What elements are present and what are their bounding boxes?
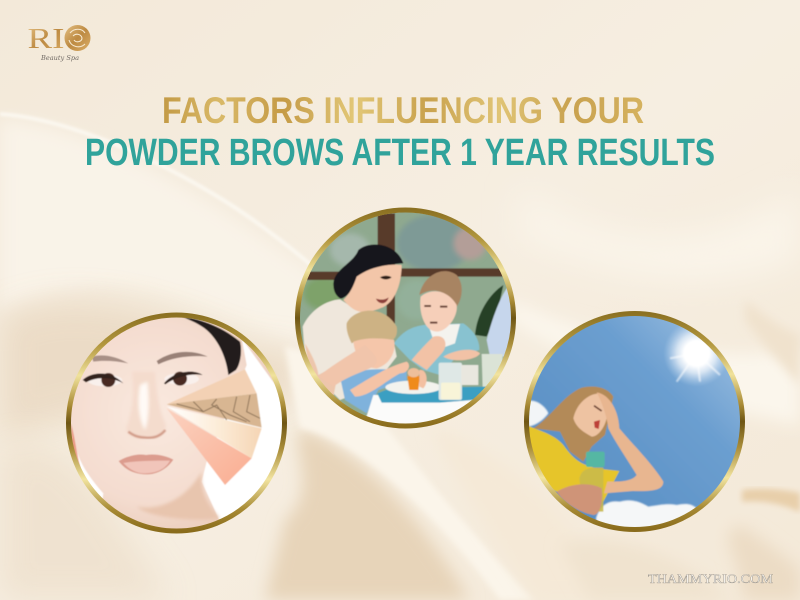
boy's hair: [347, 311, 397, 343]
logo rose emblem: [64, 25, 90, 51]
hand: [557, 484, 602, 515]
logo tagline: Beauty Spa: [40, 54, 79, 62]
closed eye: [594, 406, 602, 411]
girl's hoodie: [394, 323, 479, 375]
woman's hand: [326, 351, 371, 385]
glass of milk: [439, 363, 462, 400]
photo circle: woman under the hot sun: [526, 312, 747, 532]
girl's eyes and mouth: [424, 306, 447, 323]
woman's eye: [380, 276, 392, 279]
window frame: [307, 213, 503, 323]
arm: [597, 392, 663, 493]
plate: [385, 381, 441, 394]
title: [85, 90, 715, 174]
lower-left backdrop: [76, 452, 104, 498]
gold ring left: [68, 315, 284, 531]
title line 1: FACTORS INFLUENCING YOUR: [162, 90, 644, 131]
logo wordmark: RI: [28, 23, 64, 55]
eyebrows: [92, 355, 128, 363]
logo: RIO Beauty Spa: [28, 23, 90, 62]
gold ring middle: [298, 210, 514, 426]
girl's arms: [412, 336, 480, 370]
man's shirt: [486, 288, 511, 358]
hair: [533, 386, 613, 462]
woman's body: [303, 299, 397, 400]
hair: [182, 317, 241, 375]
skin fan: cracked: [167, 393, 262, 428]
small glass: [482, 354, 503, 387]
white backdrop: [202, 340, 282, 520]
shirt: [527, 425, 619, 502]
girl's face: [420, 291, 457, 332]
eye right: [164, 372, 203, 386]
skin base: [72, 318, 273, 528]
skin fan: cream: [167, 406, 262, 458]
jaw shade: [137, 472, 220, 520]
window garden: [300, 212, 507, 416]
photo circle: skin close-up of woman's face: [67, 315, 290, 532]
cup: [461, 365, 478, 385]
woman's hair: [333, 245, 403, 298]
plant: [475, 285, 503, 337]
girl's hair: [419, 271, 462, 307]
woman's face and neck: [343, 265, 402, 312]
boy's face: [353, 338, 394, 368]
eye left: [83, 373, 123, 387]
lips: [119, 454, 173, 474]
website watermark: THAMMYRIO.COM: [648, 572, 773, 586]
gold ring right: [526, 314, 742, 530]
face: [573, 393, 607, 437]
woman's mouth: [376, 297, 389, 303]
nose: [126, 372, 166, 438]
boy's arm: [350, 362, 409, 397]
skin fan: smooth: [167, 369, 257, 404]
skin fan: pink: [167, 408, 252, 485]
egg: [407, 368, 427, 390]
clouds: [596, 500, 697, 532]
bottle: [579, 452, 605, 512]
sun: [663, 320, 730, 387]
boy's shirt: [340, 369, 407, 413]
sky: [527, 312, 747, 532]
lips: [594, 420, 600, 429]
table cloth: [366, 394, 473, 424]
photo circle: mother and children at breakfast: [297, 210, 517, 427]
